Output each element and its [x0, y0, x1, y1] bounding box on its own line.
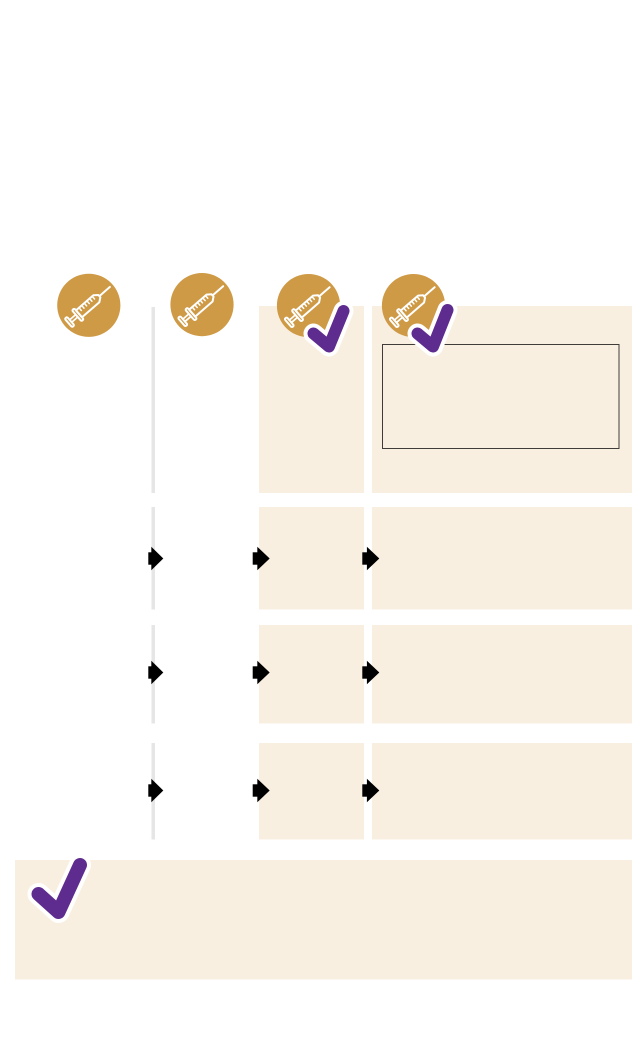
panel: column 4 row 4 [372, 743, 632, 840]
icon: syringe badge column 1 [57, 274, 120, 337]
arrow: row 2 column 1 [148, 547, 163, 570]
panel: column 4 row 3 [372, 625, 632, 724]
icon: syringe badge column 3 [277, 274, 340, 337]
panel: footer note [15, 860, 632, 980]
icon: syringe badge column 2 [170, 273, 234, 336]
arrow: row 4 column 2 [253, 779, 270, 802]
panel: column 3 row 2 [259, 507, 364, 610]
arrow: row 4 column 3 [362, 779, 379, 802]
panel: column 3 row 4 [259, 743, 364, 840]
arrow: row 3 column 3 [362, 661, 379, 684]
arrow: row 3 column 1 [148, 661, 163, 684]
icon: purple check footer [38, 865, 80, 912]
arrow: row 2 column 3 [362, 547, 379, 570]
icon: purple check column 4 [418, 310, 448, 346]
icon: syringe badge column 4 [382, 274, 445, 337]
arrow: row 2 column 2 [253, 547, 270, 570]
panel: column 4 row 2 [372, 507, 632, 610]
panel: column 4 top row [372, 306, 632, 493]
outlined box in column 4 [382, 344, 619, 448]
panel: column 3 row 3 [259, 625, 364, 724]
icon: purple check column 3 [314, 311, 344, 346]
arrow: row 4 column 1 [148, 779, 163, 802]
panel: column 3 top row [259, 306, 364, 493]
arrow: row 3 column 2 [253, 661, 270, 684]
